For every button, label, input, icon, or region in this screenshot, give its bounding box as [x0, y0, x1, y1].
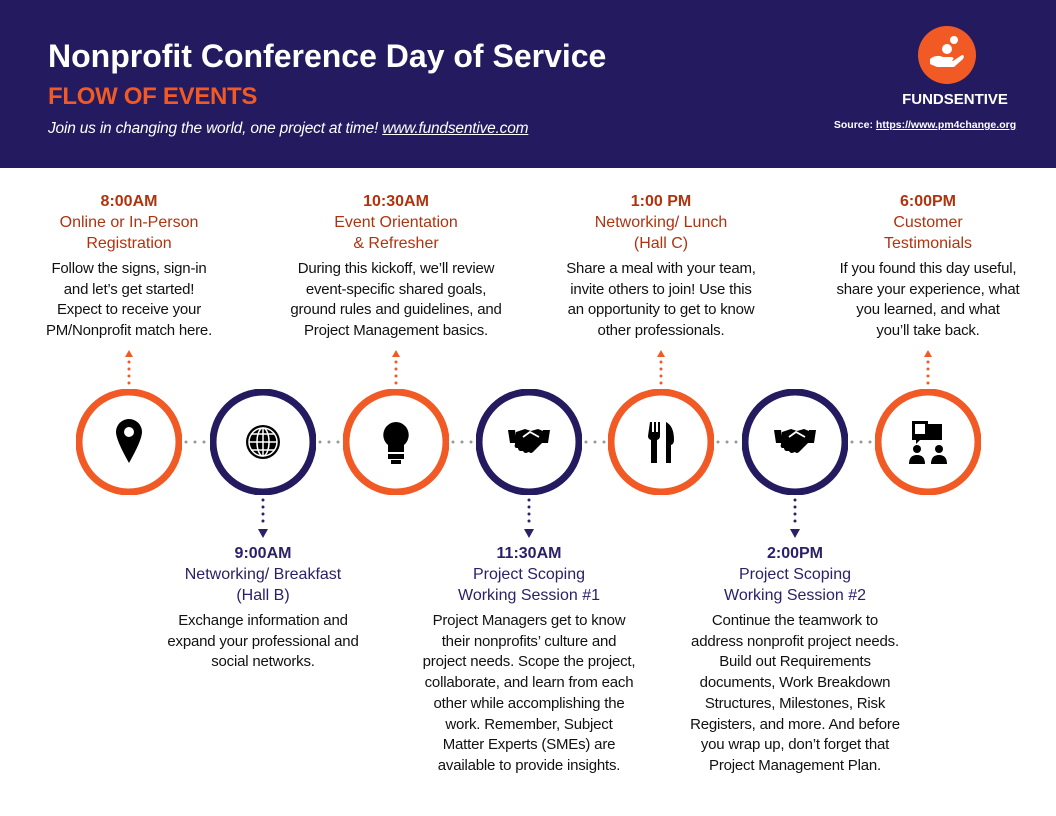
event: 10:30AM orientation [290, 193, 502, 339]
event: 2:00PM session 2: address nonprofit project needs. [691, 633, 899, 650]
event: 2:00PM session 2: Working Session #2 [724, 587, 866, 604]
event: 8:00AM registration: and let’s get started! [64, 281, 194, 298]
event: 1:00PM lunch: (Hall C) [634, 235, 688, 252]
circle 2: globe [210, 389, 316, 495]
event: 6:00PM testimonials [836, 193, 1020, 339]
event: 9:00AM breakfast [167, 545, 359, 670]
event: 10:30AM orientation: event-specific shared goals, [306, 281, 486, 298]
event: 6:00PM testimonials: If you found this day useful, [840, 260, 1016, 277]
event: 8:00AM registration [46, 193, 212, 339]
event: 2:00PM session 2: Build out Requirements [719, 653, 871, 670]
event: 2:00PM session 2 [690, 545, 900, 774]
event: 10:30AM orientation: 10:30AM [363, 193, 429, 210]
event: 2:00PM session 2: Registers, and more. And before [690, 716, 900, 733]
event: 6:00PM testimonials: Testimonials [884, 235, 972, 252]
circle 5: fork and knife [608, 389, 714, 495]
event: 10:30AM orientation: During this kickoff, we’ll review [298, 260, 494, 277]
event: 8:00AM registration: Registration [86, 235, 172, 252]
subtitle: FLOW OF EVENTS [48, 83, 257, 110]
logo [834, 26, 1016, 131]
event: 9:00AM breakfast: (Hall B) [236, 587, 290, 604]
circle 7: testimonial people [875, 389, 981, 495]
event: 11:30AM session 1 [423, 545, 635, 774]
event: 11:30AM session 1: 11:30AM [497, 545, 561, 562]
event: 6:00PM testimonials: share your experience, what [836, 281, 1020, 298]
event: 2:00PM session 2: 2:00PM [767, 545, 823, 562]
event: 1:00PM lunch: invite others to join! Use this [570, 281, 752, 298]
event: 1:00PM lunch: 1:00 PM [631, 193, 691, 210]
event: 2:00PM session 2: Continue the teamwork to [712, 612, 878, 629]
event: 8:00AM registration: PM/Nonprofit match here. [46, 322, 212, 339]
event: 11:30AM session 1: Working Session #1 [458, 587, 600, 604]
event: 9:00AM breakfast: expand your professional and [167, 633, 359, 650]
event: 11:30AM session 1: Project Managers get to know [433, 612, 625, 629]
event: 8:00AM registration: Expect to receive your [57, 301, 201, 318]
event: 11:30AM session 1: their nonprofits’ culture and [442, 633, 616, 650]
event: 9:00AM breakfast: Networking/ Breakfast [185, 566, 341, 583]
event: 8:00AM registration: Follow the signs, sign-in [51, 260, 207, 277]
event: 11:30AM session 1: Matter Experts (SMEs) are [443, 736, 615, 753]
event: 9:00AM breakfast: Exchange information and [178, 612, 348, 629]
event: 10:30AM orientation: ground rules and guidelines, and [290, 301, 502, 318]
event: 1:00PM lunch [566, 193, 756, 339]
event: 1:00PM lunch: Networking/ Lunch [595, 214, 727, 231]
event: 2:00PM session 2: documents, Work Breakdown [700, 674, 890, 691]
event: 10:30AM orientation: Event Orientation [334, 214, 458, 231]
logo: Source: https://www.pm4change.org [834, 119, 1016, 131]
event: 6:00PM testimonials: 6:00PM [900, 193, 956, 210]
event: 1:00PM lunch: Share a meal with your team, [566, 260, 756, 277]
event: 8:00AM registration: 8:00AM [101, 193, 157, 210]
event: 2:00PM session 2: you wrap up, don’t forget that [701, 736, 889, 753]
event: 8:00AM registration: Online or In-Person [60, 214, 198, 231]
circle 4: handshake [476, 389, 582, 495]
event: 6:00PM testimonials: Customer [893, 214, 963, 231]
circle 6: handshake [742, 389, 848, 495]
event: 1:00PM lunch: an opportunity to get to know [568, 301, 754, 318]
event: 10:30AM orientation: & Refresher [353, 235, 439, 252]
event: 2:00PM session 2: Project Scoping [739, 566, 851, 583]
event: 9:00AM breakfast: 9:00AM [235, 545, 291, 562]
event: 11:30AM session 1: work. Remember, Subject [445, 716, 613, 733]
event: 11:30AM session 1: Project Scoping [473, 566, 585, 583]
logo: FUNDSENTIVE [902, 91, 1008, 108]
event: 2:00PM session 2: Project Management Plan. [709, 757, 881, 774]
circle 1: location pin [76, 389, 182, 495]
header banner [0, 0, 1056, 168]
event: 9:00AM breakfast: social networks. [211, 653, 315, 670]
event: 10:30AM orientation: Project Management basics. [304, 322, 488, 339]
event: 11:30AM session 1: other while accomplishing the [434, 695, 624, 712]
event: 11:30AM session 1: collaborate, and learn from each [425, 674, 633, 691]
event: 6:00PM testimonials: you learned, and what [856, 301, 1000, 318]
title: Nonprofit Conference Day of Service [48, 38, 606, 74]
event: 6:00PM testimonials: you’ll take back. [876, 322, 980, 339]
event: 2:00PM session 2: Structures, Milestones, Risk [705, 695, 885, 712]
event: 11:30AM session 1: project needs. Scope the project, [423, 653, 635, 670]
event: 1:00PM lunch: other professionals. [598, 322, 724, 339]
event: 11:30AM session 1: available to provide insights. [438, 757, 620, 774]
circle 3: light bulb [343, 389, 449, 495]
tagline: Join us in changing the world, one project at time! www.fundsentive.com [48, 120, 528, 137]
